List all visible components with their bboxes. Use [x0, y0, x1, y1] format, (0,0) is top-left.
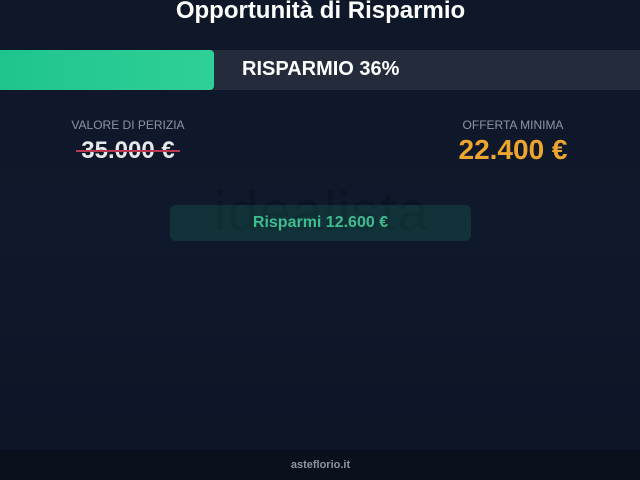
savings callout: [170, 205, 471, 241]
appraisal label: VALORE DI PERIZIA: [71, 118, 185, 132]
watermark: idealista: [214, 180, 429, 242]
appraisal amount struck through: 35.000 €: [81, 137, 175, 164]
appraisal value block: [71, 118, 185, 164]
footer: [0, 450, 640, 480]
strikethrough line: [76, 150, 180, 152]
footer site name: asteflorio.it: [291, 459, 350, 471]
minimum offer amount: 22.400 €: [458, 134, 568, 165]
progress label: RISPARMIO 36%: [242, 58, 399, 80]
progress fill: [0, 50, 214, 90]
minimum offer label: OFFERTA MINIMA: [463, 118, 563, 132]
minimum offer block: [458, 118, 568, 165]
savings progress bar: [0, 50, 640, 90]
savings text: Risparmi 12.600 €: [253, 214, 388, 231]
